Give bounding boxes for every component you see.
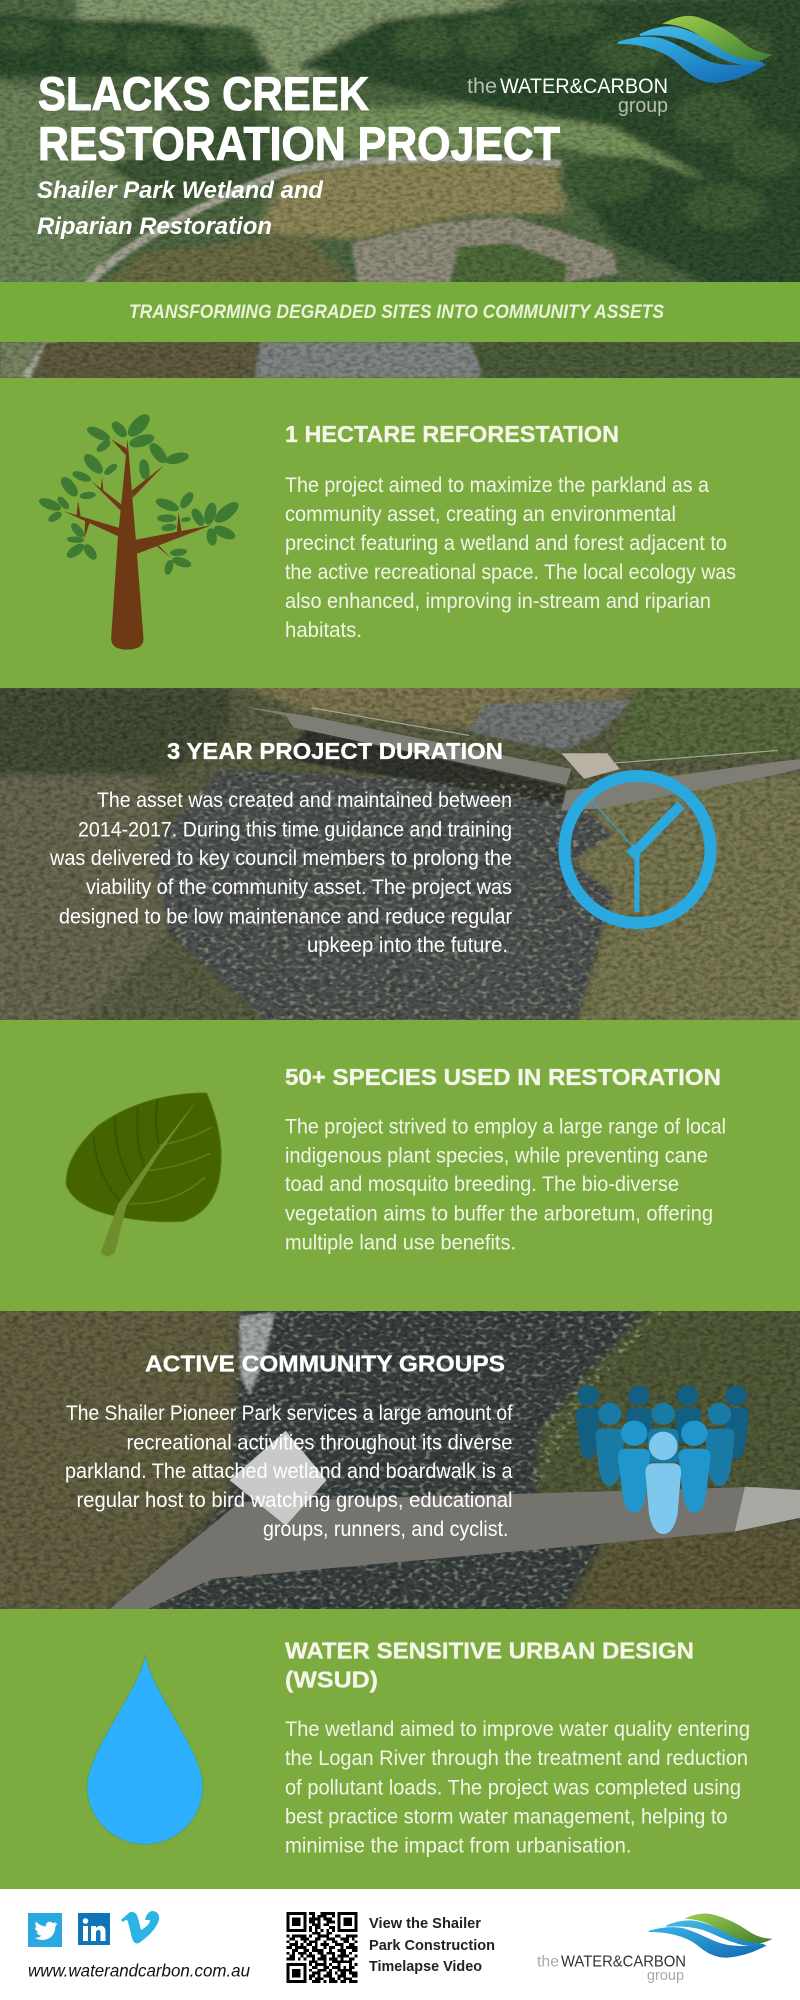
- text: reforestation description: the active recreational space. The local ecology was: [285, 561, 736, 584]
- back row: [576, 1385, 749, 1459]
- logo: the Water & Carbon group (header): [467, 17, 770, 117]
- icon: leaf: [66, 1093, 221, 1257]
- logo: the Water & Carbon group (header): the: [467, 75, 497, 98]
- text: video caption: Timelapse Video: [369, 1958, 482, 1975]
- text: species description: indigenous plant species, while preventing cane: [285, 1144, 708, 1168]
- heading: 1 hectare reforestation: 1 HECTARE REFORESTATION: [285, 421, 619, 447]
- text: species description: The project strived to employ a large range of local: [285, 1116, 726, 1138]
- heading: 50+ species: 50+ SPECIES USED IN RESTORATION: [285, 1064, 721, 1090]
- text: species description: [285, 1116, 726, 1254]
- logo: the Water & Carbon group (footer): WATER&CARBON: [561, 1954, 686, 1970]
- icon: tree: [38, 413, 241, 650]
- icon: group of people: [576, 1385, 749, 1534]
- text: video caption: Park Construction: [369, 1937, 495, 1954]
- text: species description: vegetation aims to buffer the arboretum, offering: [285, 1202, 713, 1226]
- text: reforestation description: community asset, creating an environmental: [285, 503, 676, 526]
- text: duration description: designed to be low maintenance and reduce regular: [59, 906, 512, 928]
- text: community description: regular host to bird watching groups, educational: [76, 1489, 512, 1512]
- subtitle: Riparian Restoration: [37, 213, 272, 240]
- subtitle: Shailer Park Wetland and: [37, 177, 324, 204]
- panel: 1 hectare reforestation: [0, 378, 800, 689]
- text: community description: The Shailer Pioneer Park services a large amount of: [66, 1402, 513, 1425]
- title: RESTORATION PROJECT: [38, 117, 560, 170]
- logo: the Water & Carbon group (header): WATER&CARBON: [500, 75, 668, 98]
- text: reforestation description: precinct featuring a wetland and forest adjacent to: [285, 532, 727, 555]
- title: [38, 67, 560, 170]
- heading: WSUD: WATER SENSITIVE URBAN DESIGN: [285, 1638, 694, 1664]
- text: community description: recreational activities throughout its diverse: [126, 1432, 512, 1454]
- lead person: [645, 1432, 681, 1534]
- icon: linkedin: [78, 1913, 110, 1945]
- heading: WSUD: [285, 1638, 694, 1692]
- icon: clock: [564, 776, 710, 923]
- photo: boardwalk from above: [0, 1311, 800, 1609]
- text: WSUD description: minimise the impact from urbanisation.: [285, 1834, 632, 1858]
- text: duration description: was delivered to key council members to prolong the: [49, 847, 512, 870]
- banner: tagline: TRANSFORMING DEGRADED SITES INTO COMMUNITY ASSETS: [129, 302, 664, 323]
- logo: the Water & Carbon group (footer): the: [537, 1954, 559, 1970]
- logo: the Water & Carbon group (header): group: [618, 95, 668, 117]
- panel: active community groups (photo background): [0, 1304, 800, 1617]
- title: SLACKS CREEK: [38, 67, 369, 120]
- text: community description: [65, 1402, 513, 1541]
- text: duration description: [49, 789, 512, 957]
- text: duration description: upkeep into the future.: [307, 934, 508, 957]
- text: duration description: viability of the community asset. The project was: [86, 876, 512, 899]
- text: WSUD description: of pollutant loads. The project was completed using: [285, 1776, 741, 1800]
- middle row: [595, 1403, 735, 1486]
- text: community description: groups, runners, and cyclist.: [263, 1518, 508, 1541]
- panel: 3 year project duration (photo background): [0, 680, 800, 1028]
- text: WSUD description: The wetland aimed to improve water quality entering: [285, 1718, 750, 1741]
- text: website: www.waterandcarbon.com.au: [28, 1960, 250, 1980]
- text: reforestation description: [285, 474, 736, 642]
- icon: water drop: [87, 1654, 203, 1844]
- text: WSUD description: [285, 1718, 750, 1858]
- text: reforestation description: habitats.: [285, 619, 362, 642]
- text: duration description: 2014-2017. During this time guidance and training: [78, 818, 512, 842]
- panel: 50+ species used in restoration: [0, 1020, 800, 1311]
- logo: the Water & Carbon group (footer): group: [647, 1967, 684, 1984]
- subtitle: [37, 177, 324, 240]
- tree clumps: [0, 5, 800, 230]
- panel: water sensitive urban design: [0, 1609, 800, 1889]
- heading: WSUD: (WSUD): [285, 1666, 378, 1692]
- heading: 3 year project duration: 3 YEAR PROJECT DURATION: [167, 738, 503, 764]
- QR code: [286, 1912, 358, 1983]
- banner: tagline: [0, 282, 800, 342]
- text: species description: toad and mosquito breeding. The bio-diverse: [285, 1173, 679, 1196]
- icon: vimeo: [121, 1911, 159, 1943]
- logo: the Water & Carbon group (footer): [537, 1914, 770, 1984]
- photo: aerial view of wetland and park: [0, 0, 800, 378]
- footer: [28, 1911, 770, 1984]
- text: duration description: The asset was created and maintained between: [97, 789, 512, 812]
- photo: boardwalk over wetland: [0, 688, 800, 1020]
- front row: [618, 1421, 711, 1513]
- text: WSUD description: best practice storm water management, helping to: [285, 1806, 728, 1828]
- text: community description: parkland. The attached wetland and boardwalk is a: [65, 1460, 513, 1483]
- text: WSUD description: the Logan River through the treatment and reduction: [285, 1747, 748, 1770]
- icon: twitter: [28, 1913, 62, 1947]
- text: video caption: View the Shailer: [369, 1915, 481, 1932]
- text: reforestation description: also enhanced, improving in-stream and riparian: [285, 590, 711, 613]
- text: reforestation description: The project aimed to maximize the parkland as a: [285, 474, 709, 497]
- heading: active community groups: ACTIVE COMMUNITY GROUPS: [145, 1350, 505, 1376]
- text: video caption: [369, 1915, 495, 1975]
- text: species description: multiple land use benefits.: [285, 1232, 516, 1254]
